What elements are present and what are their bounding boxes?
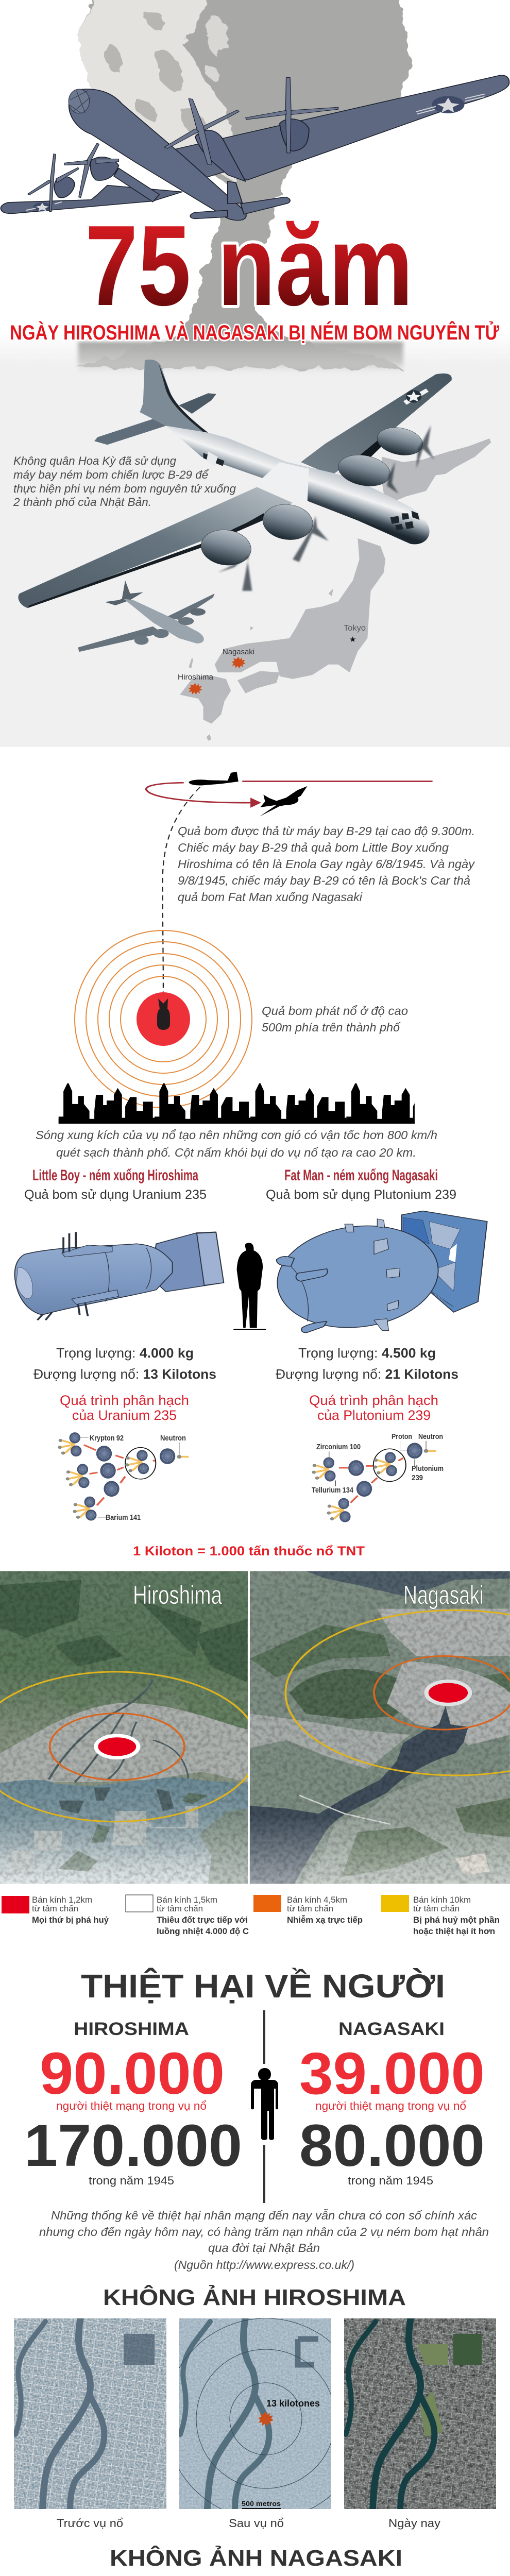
propellers [28, 78, 338, 212]
reclaimed land patches [11, 1806, 198, 1874]
intro text: thực hiện phi vụ ném bom nguyên tử xuống [13, 482, 236, 495]
city labels on map: Nagasaki [223, 648, 254, 656]
heading: uranium fission [60, 1393, 189, 1423]
fuselage star [203, 453, 225, 466]
legend: 4.5 km radius: Bán kính 4,5km [287, 1895, 347, 1905]
cockpit glazing [390, 511, 419, 531]
legend: 10 km radius: Bán kính 10km [413, 1895, 471, 1905]
stats: Nagasaki: người thiệt mạng trong vụ nổ [315, 2099, 466, 2112]
stats: Hiroshima [24, 2019, 242, 2187]
stats: Little Boy: Trọng lượng: 4.000 kg [56, 1345, 194, 1361]
labels: uranium fission: Barium 141 [106, 1513, 141, 1522]
legend: 10 km radius: từ tâm chấn [413, 1904, 460, 1913]
stats: Fat Man: Trọng lượng: 4.500 kg [298, 1345, 436, 1361]
city labels on map: Hiroshima [178, 673, 214, 682]
bomb: Little Boy [14, 1232, 224, 1320]
mountains [290, 1669, 400, 1719]
large B-29 photo [18, 360, 452, 608]
intro text: 2 thành phố của Nhật Bản. [13, 496, 151, 509]
labels: plutonium fission: Neutron [418, 1432, 443, 1441]
mountains [0, 1580, 247, 1682]
divider with person icon [251, 2010, 278, 2203]
text: bomb dropped: quả bom Fat Man xuống Nagasaki [178, 890, 363, 904]
legend: 1.2 km radius [2, 1895, 109, 1925]
city labels on map: ★ [349, 635, 356, 644]
plane silhouette 1 [189, 772, 239, 786]
text: uranium: Quả bom sử dụng Uranium 235 [24, 1188, 207, 1202]
labels: uranium fission: Neutron [160, 1434, 186, 1443]
diagram: plutonium 239 fission chain [312, 1441, 436, 1522]
right wing [301, 374, 452, 475]
stats: Nagasaki: NAGASAKI [338, 2019, 445, 2039]
diagram: bomb drop flight paths [146, 772, 433, 992]
legend: 4.5 km radius: Nhiễm xạ trực tiếp [287, 1915, 363, 1925]
return curve and arrow [146, 783, 252, 803]
Kyushu [180, 675, 231, 724]
fuselage [166, 426, 430, 544]
stats: Nagasaki: 39.000 [299, 2041, 485, 2107]
legend: 10 km radius: Bị phá huỷ một phần [413, 1915, 500, 1925]
legend: 1.5 km radius: từ tâm chấn [157, 1904, 203, 1913]
stats: Hiroshima: người thiệt mạng trong vụ nổ [56, 2099, 207, 2112]
Shikoku [237, 671, 280, 693]
label: 13 kilotones: 13 kilotones [266, 2398, 320, 2409]
captions: Hiroshima photos: Ngày nay [388, 2517, 440, 2530]
icon: man silhouette for scale [233, 1243, 266, 1330]
labels: uranium fission [90, 1434, 186, 1522]
labels: plutonium fission [312, 1432, 444, 1495]
panel: header background fade [0, 335, 510, 747]
captions: Hiroshima photos: Trước vụ nổ [57, 2517, 123, 2530]
intro text: máy bay ném bom chiến lược B-29 để [13, 468, 209, 481]
diagram: uranium 235 fission chain [58, 1432, 189, 1521]
left wing [1, 185, 182, 213]
stats: Nagasaki: 80.000 [299, 2113, 485, 2179]
legend: 1.5 km radius: Bán kính 1,5km [157, 1895, 217, 1905]
text: shock wave: Sóng xung kích của vụ nổ tạo nên những cơn gió có vận tốc hơn 800 km/h [36, 1128, 437, 1142]
photo: Hiroshima before [14, 2313, 166, 2514]
blast zones: Hiroshima [0, 1672, 259, 1822]
stats: Little Boy [33, 1345, 216, 1382]
heading: uranium fission: Quá trình phân hạch [60, 1393, 189, 1408]
bomb trajectory [163, 787, 200, 992]
rivers [49, 1680, 189, 1782]
text: plutonium: Quả bom sử dụng Plutonium 239 [266, 1188, 456, 1202]
legend: 1.2 km radius: Bán kính 1,2km [32, 1895, 92, 1905]
small B-29 photo [78, 581, 215, 652]
map texture left [0, 1571, 248, 1884]
blast zones: Nagasaki [285, 1611, 510, 1775]
text: detonation height [262, 1004, 408, 1034]
heading: Fat Man: Fat Man - ném xuống Nagasaki [284, 1167, 438, 1184]
stats: Hiroshima: trong năm 1945 [89, 2174, 174, 2187]
text: casualty note and source: Những thống kê về thiệt hại nhân mạng đến nay vẫn chưa có con số chính xác [51, 2208, 478, 2222]
right wing [173, 75, 509, 180]
urban areas [377, 1608, 510, 1745]
map label: Hiroshima: Hiroshima [133, 1581, 222, 1609]
stats: Little Boy: Đượng lượng nổ: 13 Kilotons [33, 1366, 216, 1382]
intro text [13, 454, 236, 509]
stats: Hiroshima: HIROSHIMA [74, 2019, 189, 2039]
text: bomb dropped: Chiếc máy bay B-29 thả quả bom Little Boy xuống [178, 841, 449, 854]
left engines [91, 157, 118, 180]
top sea [305, 1571, 510, 1597]
stats: Fat Man [276, 1345, 458, 1382]
icon: Hiroshima blast [188, 683, 202, 694]
title: 75 năm: 75 năm [85, 202, 413, 330]
map of Japan [180, 438, 491, 741]
islands [59, 1793, 208, 1872]
photo: Nagasaki after [171, 2537, 382, 2576]
city [0, 1703, 248, 1784]
city labels on map: Tokyo [344, 624, 366, 633]
bay [250, 1706, 468, 1884]
stats: Fat Man: Đượng lượng nổ: 21 Kilotons [276, 1366, 458, 1382]
captions: Hiroshima photos: Sau vụ nổ [229, 2517, 284, 2530]
map: Nagasaki blast radii [250, 1571, 510, 1884]
stats: Nagasaki [299, 2019, 485, 2187]
legend: 1.5 km radius [126, 1895, 249, 1936]
water [0, 1777, 248, 1884]
scale bar: Hiroshima: 500 metros [242, 2500, 281, 2507]
flight line [242, 780, 433, 783]
stats: Hiroshima: 90.000 [40, 2041, 225, 2107]
vertical fin [140, 360, 208, 433]
note: kiloton definition: 1 Kiloton = 1.000 tấn thuốc nổ TNT [133, 1544, 365, 1558]
text: detonation height: 500m phía trên thành phố [262, 1021, 401, 1034]
icon: Hiroshima hypocentre blast [258, 2412, 274, 2426]
text: casualty note and source: nhưng cho đến ngày hôm nay, có hàng trăm nạn nhân của 2 vụ ném bom hạt nhân [39, 2225, 489, 2239]
map texture right [250, 1571, 510, 1884]
text: casualty note and source: qua đời tại Nhật Bản [208, 2241, 320, 2255]
text: bomb dropped: 9/8/1945, chiếc máy bay B-29 có tên là Bock's Car thả [178, 874, 470, 887]
labels: plutonium fission: Tellurium 134 [312, 1486, 354, 1495]
mushroom cloud [78, 0, 411, 376]
photo: Hiroshima after [179, 2318, 331, 2509]
labels: plutonium fission: Zirconium 100 [316, 1443, 361, 1451]
heading: plutonium fission: Quá trình phân hạch [309, 1393, 438, 1408]
text: casualty note and source [39, 2208, 489, 2272]
south land [302, 1774, 510, 1884]
national star right [416, 94, 485, 114]
icon: person [251, 2068, 278, 2140]
text: bomb dropped [178, 824, 475, 904]
plane silhouette 2 [260, 786, 308, 817]
heading: plutonium fission [309, 1393, 438, 1423]
text: shock wave [36, 1128, 437, 1159]
labels: plutonium fission: Proton [392, 1432, 412, 1441]
labels: plutonium fission: 239 [412, 1473, 423, 1482]
heading: plutonium fission: của Plutonium 239 [317, 1408, 431, 1423]
legend: 1.5 km radius: luồng nhiệt 4.000 độ C [157, 1926, 249, 1936]
nose glazing [69, 89, 91, 113]
photo: Hiroshima today [344, 2313, 496, 2514]
heading: Nagasaki aerial photos: KHÔNG ẢNH NAGASAKI [110, 2545, 402, 2571]
labels: uranium fission: Krypton 92 [90, 1434, 124, 1443]
city skyline silhouette [59, 1083, 443, 1124]
legend: 10 km radius: hoặc thiệt hại ít hơn [413, 1926, 495, 1936]
stabilisers [94, 419, 166, 445]
text: shock wave: quét sạch thành phố. Cột nấm khói bụi do vụ nổ tạo ra cao 20 km. [56, 1146, 416, 1159]
tail surfaces [190, 197, 290, 218]
text: bomb dropped: Quả bom được thả từ máy bay B-29 tại cao độ 9.300m. [178, 824, 475, 838]
legend: 1.5 km radius: Thiêu đốt trực tiếp với [157, 1915, 248, 1925]
map: Hiroshima blast radii [0, 1571, 248, 1884]
text: bomb dropped: Hiroshima có tên là Enola Gay ngày 6/8/1945. Và ngày [178, 857, 475, 871]
blurred propellers [218, 426, 434, 591]
explosion core with bomb [137, 992, 190, 1046]
city labels on map [178, 624, 366, 682]
national star left [26, 202, 62, 211]
legend: 10 km radius [381, 1895, 500, 1936]
heading: Little Boy: Little Boy - ném xuống Hiroshima [32, 1167, 198, 1184]
heading: Hiroshima aerial photos: KHÔNG ẢNH HIROSHIMA [103, 2284, 406, 2310]
islets [189, 588, 333, 741]
engines [195, 423, 427, 570]
captions: Hiroshima photos [57, 2517, 440, 2530]
legend: 1.2 km radius: Mọi thứ bị phá huỷ [32, 1915, 109, 1925]
map label: Nagasaki: Nagasaki [403, 1581, 484, 1609]
intro text: Không quân Hoa Kỳ đã sử dụng [13, 454, 177, 467]
right engines [195, 130, 246, 181]
legend: 4.5 km radius [253, 1895, 363, 1925]
stats: Hiroshima: 170.000 [24, 2113, 242, 2179]
bright wing root [257, 462, 309, 503]
heading: uranium fission: của Uranium 235 [72, 1408, 177, 1423]
blast rings [75, 930, 252, 1108]
legend: 4.5 km radius: từ tâm chấn [287, 1904, 333, 1913]
text: detonation height: Quả bom phát nổ ở độ cao [262, 1004, 408, 1018]
bomb: Fat Man [265, 1211, 487, 1340]
labels: plutonium fission: Plutonium [412, 1464, 444, 1473]
illustrated B-29 bomber [1, 75, 509, 221]
wing star [403, 388, 429, 405]
text: casualty note and source: (Nguồn http://www.express.co.uk/) [174, 2258, 354, 2272]
legend: 1.2 km radius: từ tâm chấn [32, 1904, 78, 1913]
Hokkaido [381, 438, 491, 501]
stats: Nagasaki: trong năm 1945 [348, 2174, 433, 2187]
left wing [18, 487, 293, 608]
heading: human losses: THIỆT HẠI VỀ NGƯỜI [81, 1967, 445, 2005]
icon: Nagasaki blast [231, 657, 246, 668]
fuselage [69, 89, 246, 221]
Honshu [215, 538, 385, 679]
